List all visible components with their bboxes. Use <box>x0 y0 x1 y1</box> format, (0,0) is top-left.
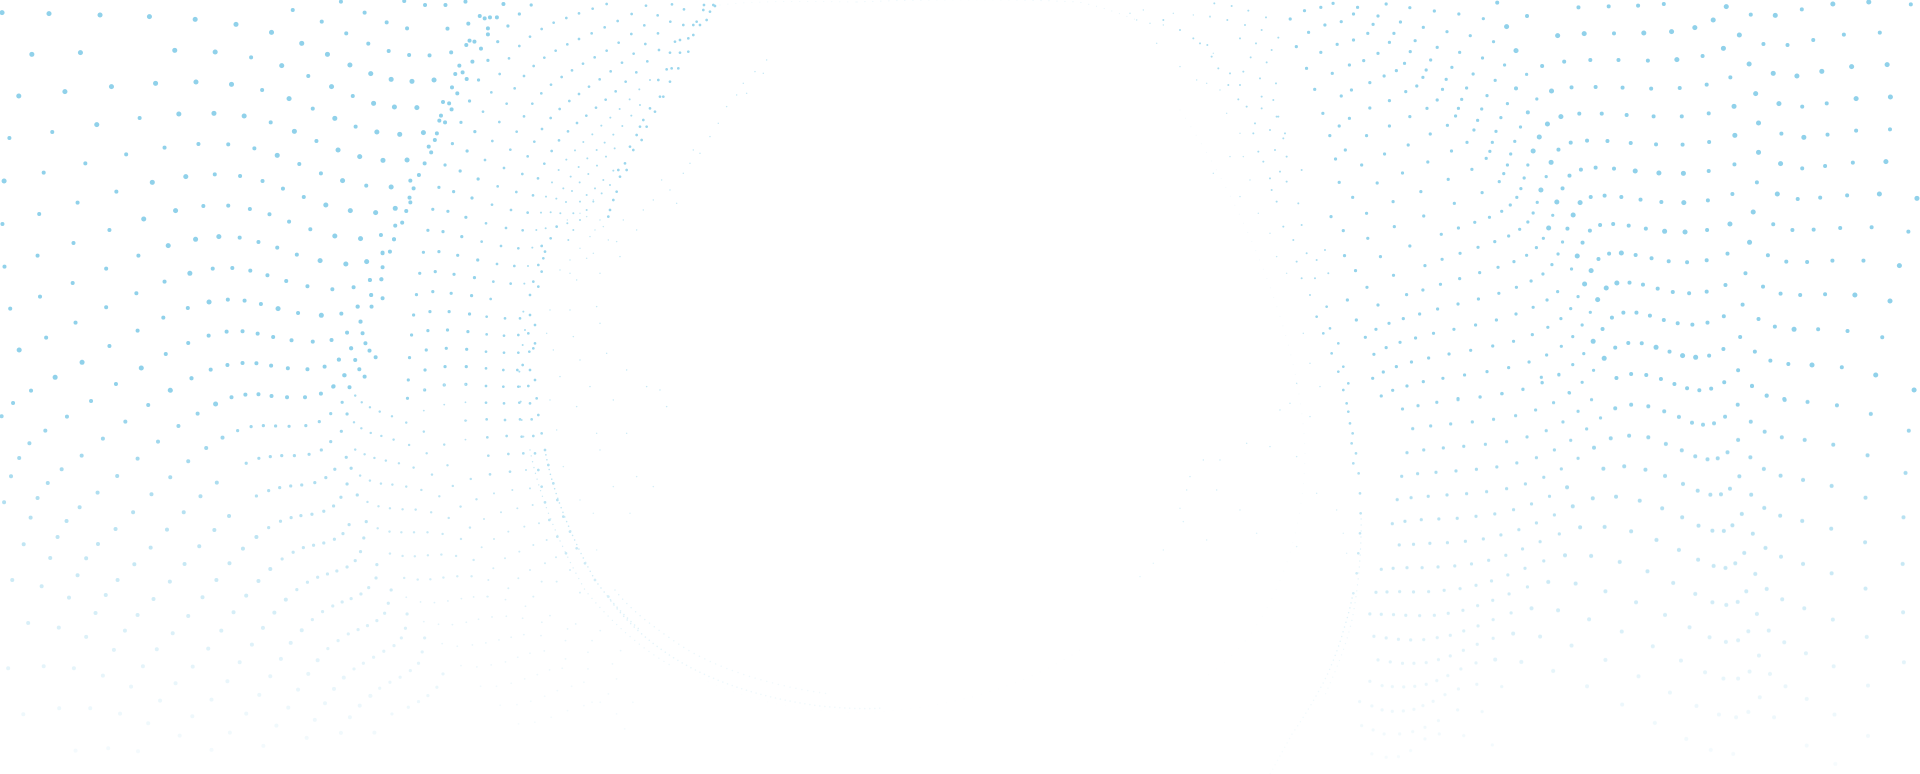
left rows: large dots <box>2 13 434 404</box>
right rows: medium dots <box>1497 3 1911 399</box>
dots: left wave field <box>2 1 633 751</box>
lower left rows <box>238 402 443 714</box>
lower left rows toward the ring <box>354 396 476 580</box>
lower right wave rows <box>1495 386 1909 764</box>
dots: ring band, right side <box>1140 307 1361 593</box>
dots: ring band, left side <box>482 307 667 597</box>
concentric arcs, upper left of the ring <box>482 4 684 299</box>
lattice left of the ring band <box>486 317 523 474</box>
ring: fine dots around the central opening <box>530 0 1361 774</box>
lower right rows rising from the ring <box>1360 375 1601 757</box>
ring band: faint inner scatter, upper left <box>560 60 767 280</box>
dots: right wave field <box>1290 2 1917 764</box>
faint scatter inside the ring <box>547 307 667 550</box>
right rows: large dots <box>1507 2 1917 390</box>
crease: dense band of dots <box>333 4 503 387</box>
left rows: medium dots <box>2 1 468 397</box>
dots: between the left crease and the ring, upper part <box>482 4 767 299</box>
lower right quadrant dots <box>1360 375 1909 764</box>
dense band scatter <box>523 315 608 597</box>
ring band scatter, upper right <box>1163 20 1328 295</box>
lower left scatter <box>2 377 374 751</box>
faint scatter inside the ring <box>1140 333 1347 577</box>
ring band scatter, right side <box>1317 307 1361 593</box>
small dots above the ring band <box>1210 3 1285 133</box>
lower left quadrant dots <box>2 377 633 751</box>
dots: right arcs and ring band, upper part <box>1130 3 1328 295</box>
arcs just right of the crease <box>407 5 531 398</box>
concentric arcs nearer the ring <box>524 80 650 284</box>
faint scatter at the top of the ring <box>1130 10 1287 273</box>
right arcs near the top of the ring <box>1290 3 1594 399</box>
ring band: dense scatter, upper left <box>530 5 715 295</box>
